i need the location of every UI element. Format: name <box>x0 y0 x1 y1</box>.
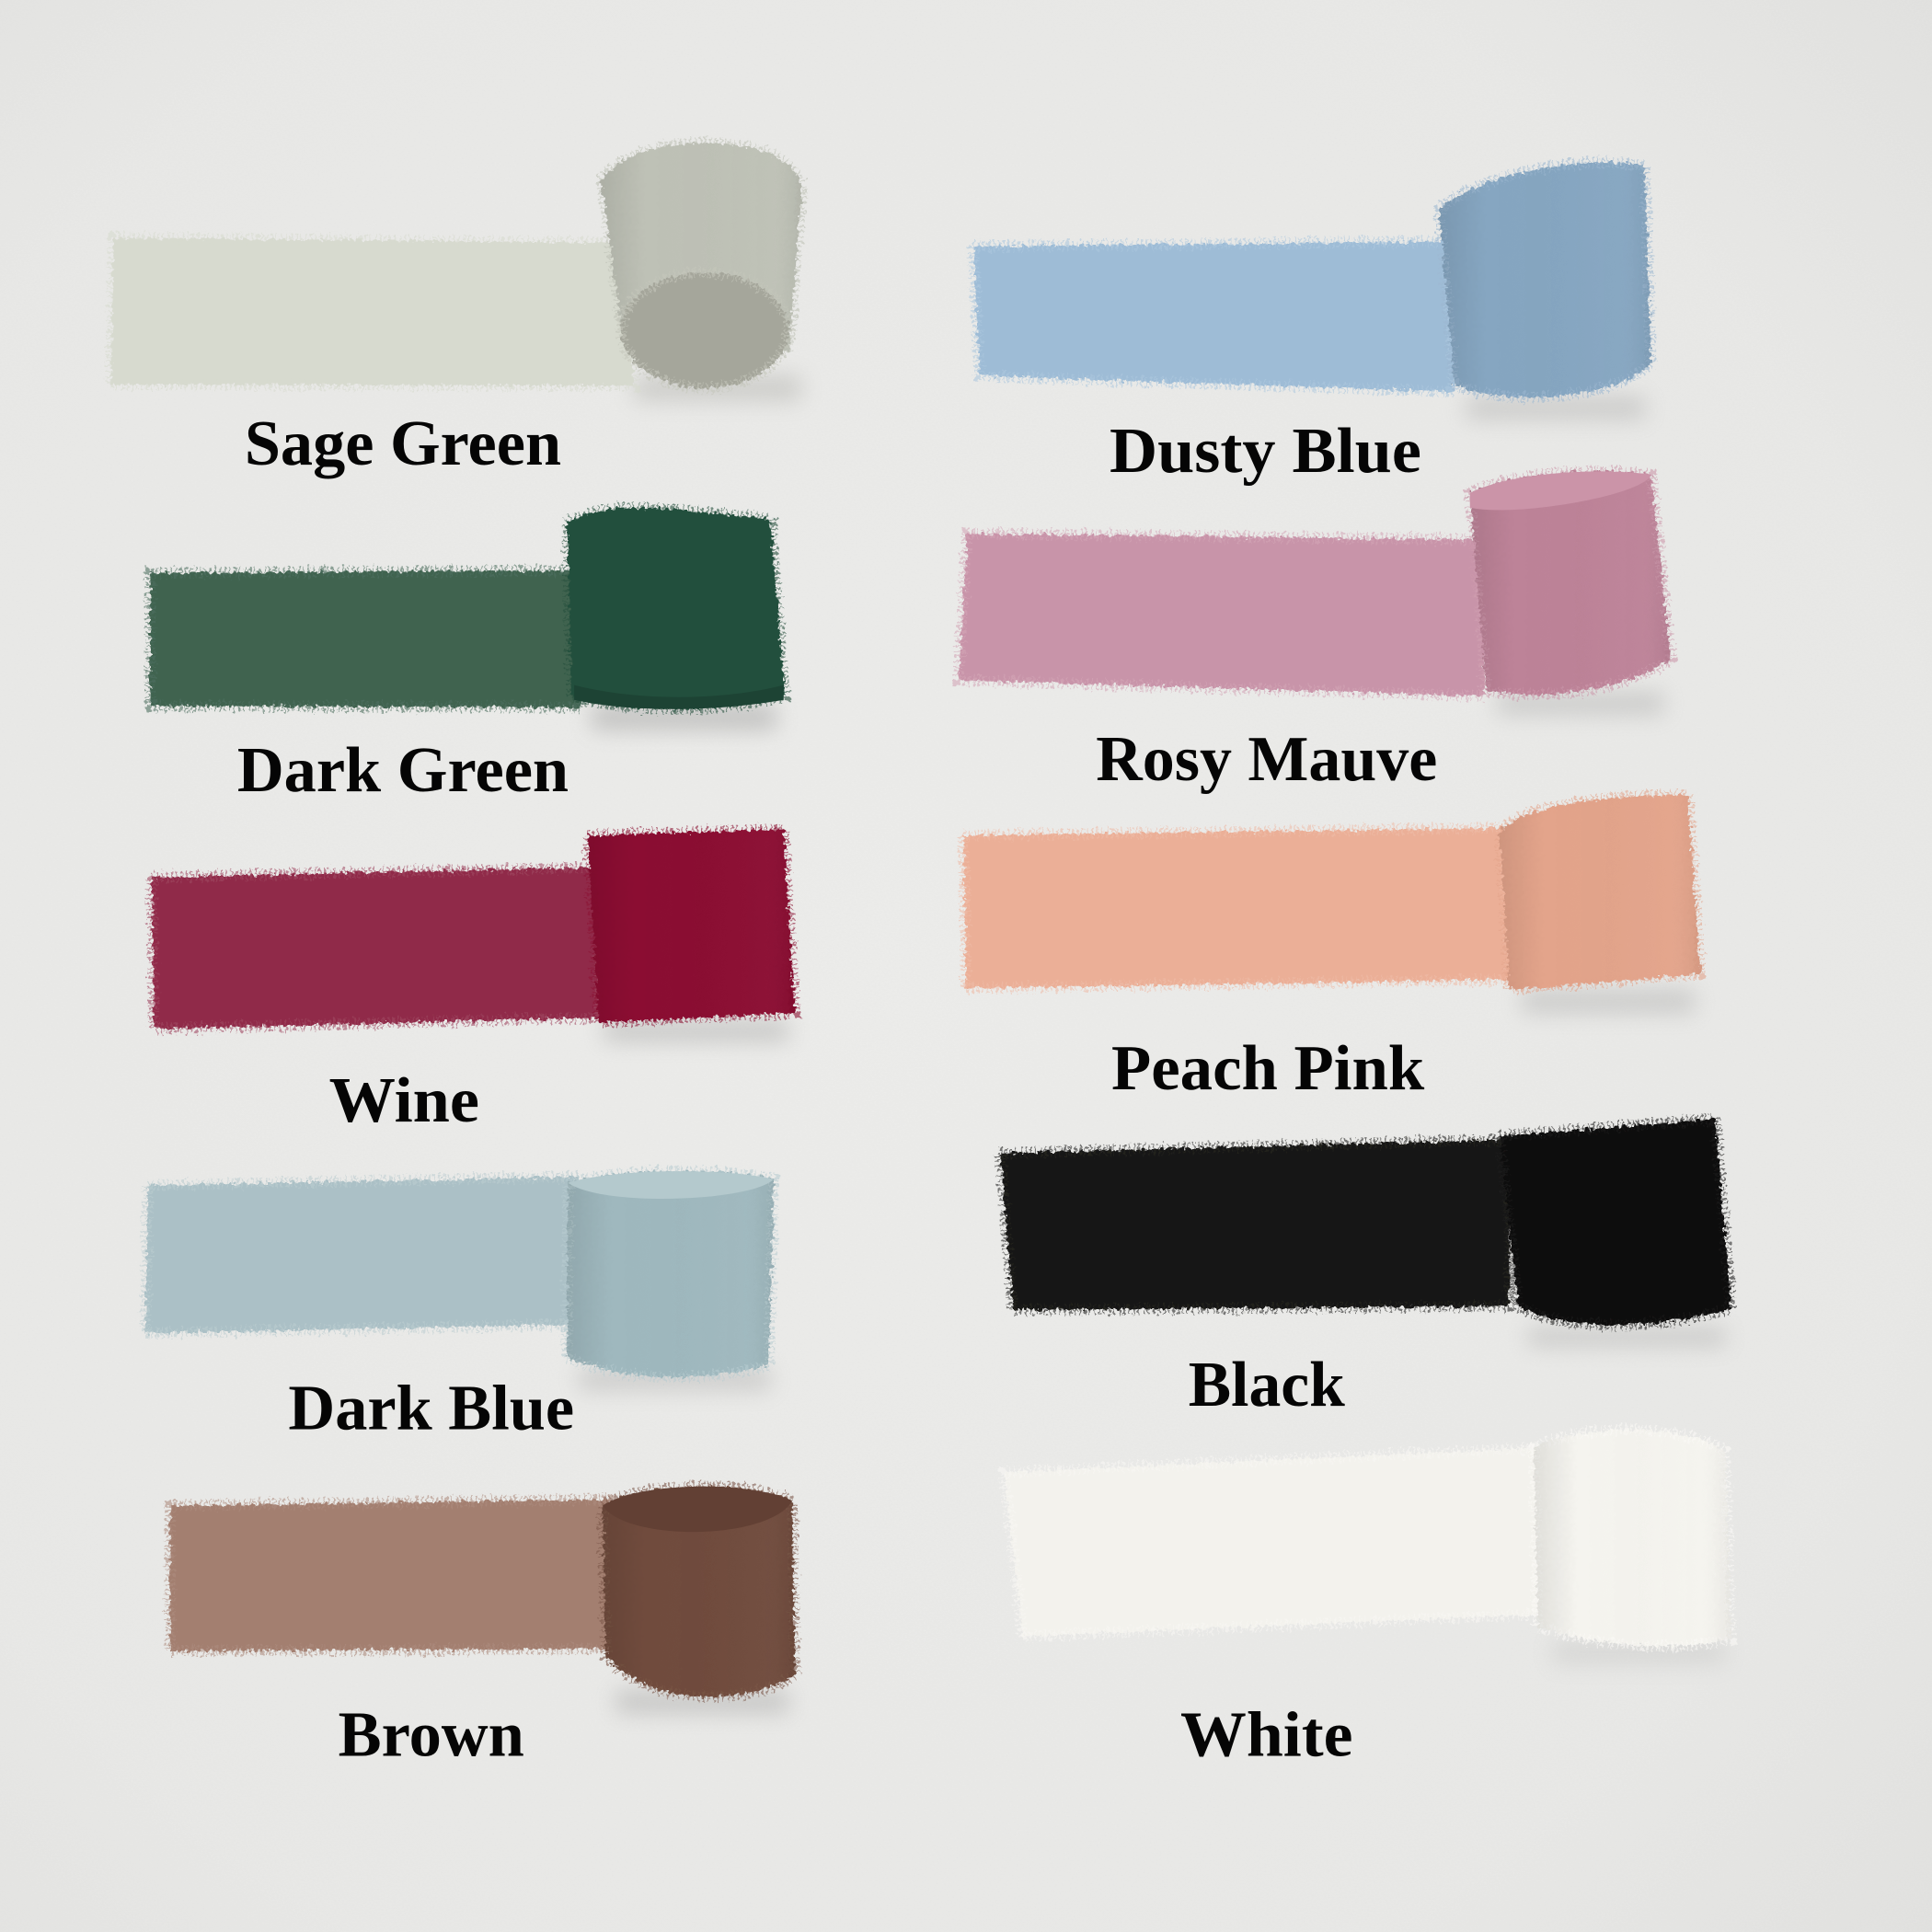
sage roll <box>602 143 802 351</box>
ribbon: rosy mauve <box>959 471 1671 715</box>
label: wine: Wine <box>329 1065 479 1136</box>
dark green strip <box>150 570 581 707</box>
white strip <box>1005 1448 1540 1637</box>
dusty blue roll <box>1439 163 1651 397</box>
ribbon: black <box>1001 1119 1731 1345</box>
label: brown: Brown <box>339 1699 524 1770</box>
label: rosy mauve: Rosy Mauve <box>1096 724 1437 795</box>
black strip <box>1001 1140 1510 1310</box>
peach pink strip <box>963 828 1510 988</box>
ribbon: dark green <box>150 508 785 730</box>
ribbon: dusty blue <box>973 163 1651 419</box>
sage strip <box>111 237 635 385</box>
sage roll end <box>621 272 788 388</box>
wine strip <box>152 868 602 1029</box>
brown strip <box>170 1500 610 1651</box>
ribbon: sage green <box>111 143 802 400</box>
ribbon: dark blue <box>145 1171 774 1390</box>
brown roll <box>603 1487 795 1696</box>
ribbon: peach pink <box>963 795 1700 1013</box>
dark green roll <box>567 508 785 709</box>
ribbon: white <box>1005 1430 1731 1663</box>
label: white: White <box>1180 1699 1353 1770</box>
label: black: Black <box>1189 1350 1345 1420</box>
peach pink roll <box>1500 795 1700 989</box>
rosy mauve strip <box>959 534 1485 696</box>
dusty blue strip <box>973 241 1454 392</box>
label: dark blue: Dark Blue <box>288 1374 574 1444</box>
ribbon: brown <box>170 1487 795 1713</box>
white roll <box>1534 1430 1731 1646</box>
dark blue strip <box>145 1177 579 1333</box>
label: dusty blue: Dusty Blue <box>1110 416 1421 487</box>
label: sage green: Sage Green <box>245 408 561 479</box>
label: peach pink: Peach Pink <box>1111 1033 1424 1104</box>
black roll <box>1500 1119 1731 1325</box>
dark blue roll <box>567 1171 774 1377</box>
wine roll <box>588 829 795 1023</box>
label: dark green: Dark Green <box>237 735 569 806</box>
rosy mauve roll <box>1470 471 1671 695</box>
ribbon: wine <box>152 829 795 1041</box>
